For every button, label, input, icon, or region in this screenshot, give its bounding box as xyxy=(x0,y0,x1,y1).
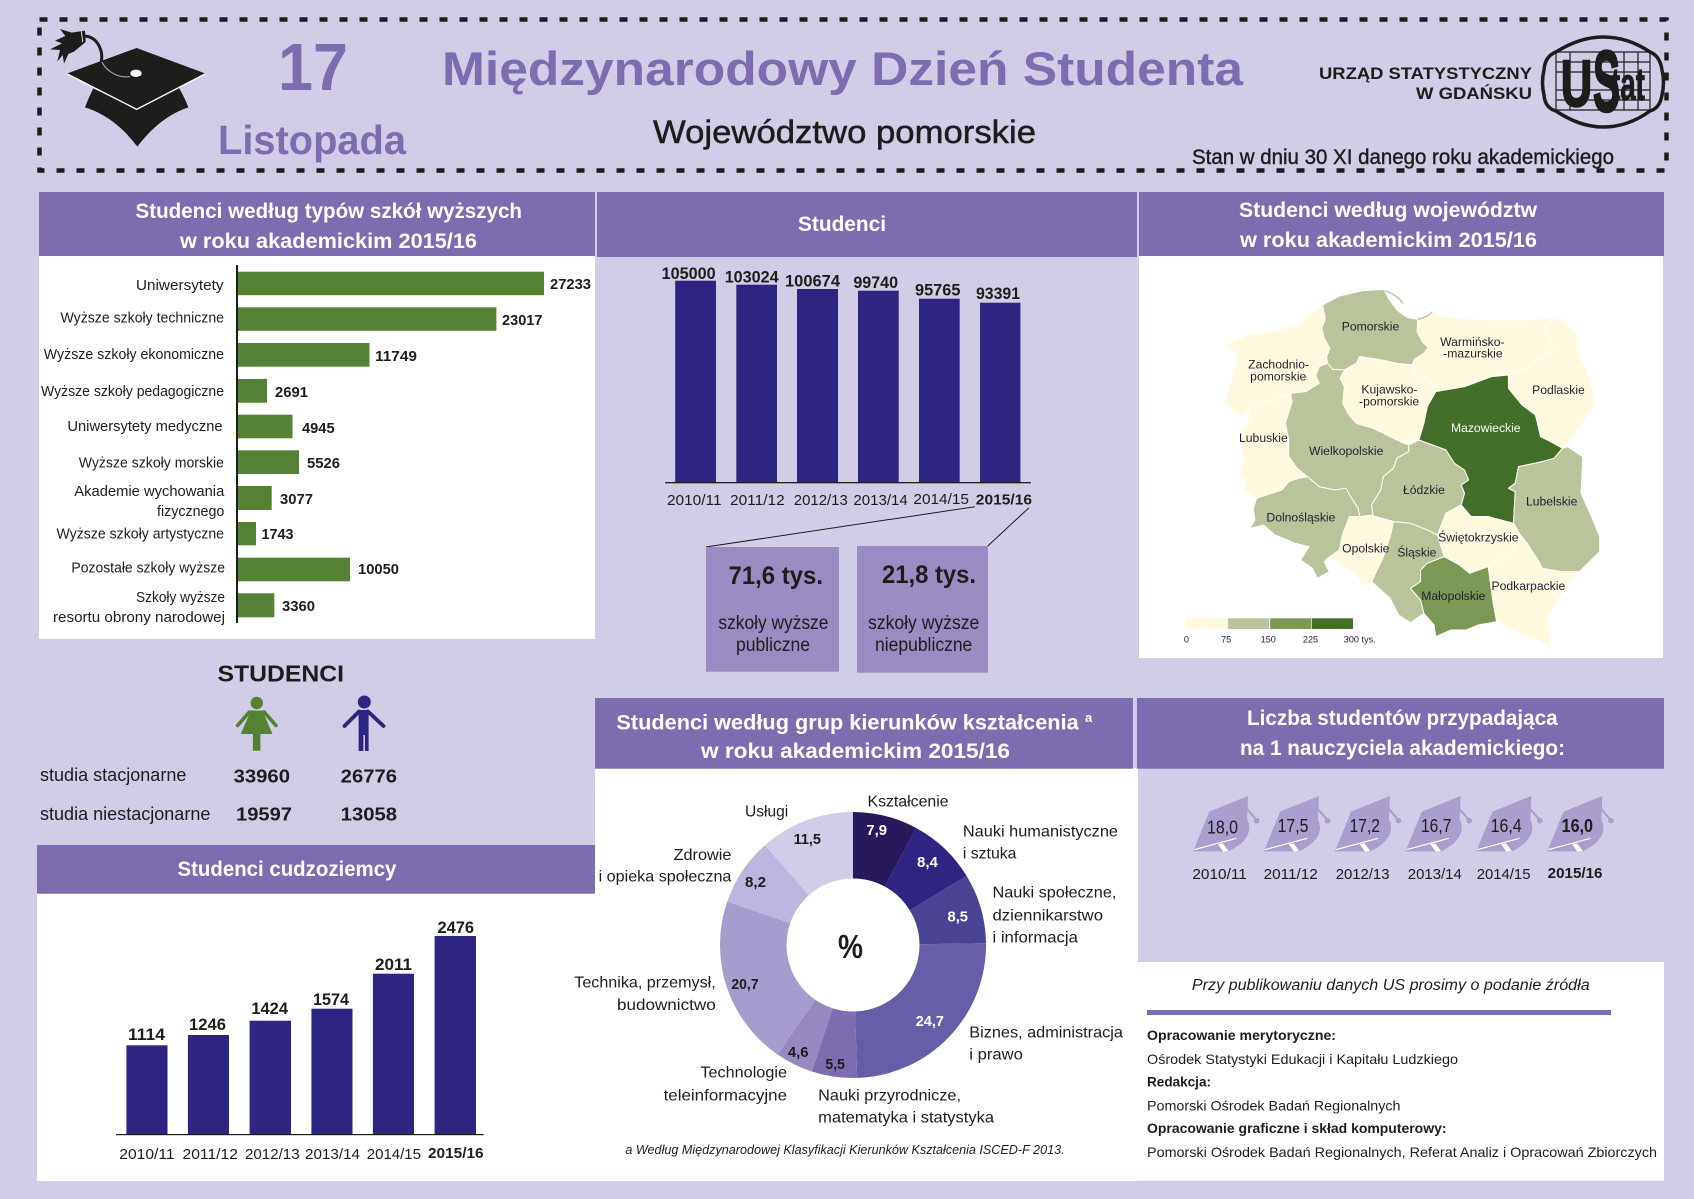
map legend xyxy=(1184,618,1376,645)
donut chart: 8,2 xyxy=(745,874,766,891)
bar chart: school types: 4945 xyxy=(302,420,335,437)
panel: school types xyxy=(39,192,595,639)
bar chart: foreign students: 2012/13 xyxy=(245,1146,300,1163)
bar chart: school types: Wyższe szkoły morskie xyxy=(79,456,224,472)
panel: students per teacher xyxy=(1137,698,1664,883)
subtitle: Województwo pomorskie xyxy=(653,114,1036,150)
cap icons with values: 17,5 xyxy=(1278,816,1308,836)
bar chart: foreign students xyxy=(116,918,484,1163)
icon: man xyxy=(344,696,384,751)
callout connector lines xyxy=(706,507,1029,547)
bar chart: students: 105000 xyxy=(662,264,716,283)
bar chart: school types: 3360 xyxy=(282,598,315,615)
bar chart: school types: 10050 xyxy=(358,561,399,578)
bar chart: foreign students: 2010/11 xyxy=(119,1146,175,1163)
heading: school types: w roku akademickim 2015/16 xyxy=(179,230,477,253)
heading: school types xyxy=(136,200,522,253)
donut labels: Zdrowie xyxy=(674,847,732,864)
heading: students: Studenci xyxy=(798,213,886,236)
header frame xyxy=(40,20,1666,170)
bar chart: foreign students: 2011 xyxy=(375,955,412,974)
donut labels: Biznes, administracja xyxy=(969,1025,1123,1042)
bar chart: school types: Szkoły wyższe xyxy=(136,590,225,606)
cap icons with values: 16,7 xyxy=(1421,816,1451,836)
callout: non-public schools: szkoły wyższe xyxy=(868,613,979,634)
title: Międzynarodowy Dzień Studenta xyxy=(442,42,1244,95)
bar chart: school types: 2691 xyxy=(275,384,308,401)
bar chart: school types: Wyższe szkoły ekonomiczne xyxy=(44,347,224,363)
map of Poland: Dolnośląskie xyxy=(1266,511,1336,525)
bar chart: foreign students: 2011/12 xyxy=(182,1146,238,1163)
bar chart: school types: 1743 xyxy=(262,526,294,543)
donut labels: i prawo xyxy=(969,1046,1023,1063)
cap icons with values: 2013/14 xyxy=(1408,866,1462,883)
map of Poland: Łódzkie xyxy=(1403,483,1445,497)
heading: voivodeships: w roku akademickim 2015/16 xyxy=(1239,229,1537,252)
map legend: 150 xyxy=(1261,635,1276,645)
bar chart: students: 103024 xyxy=(725,267,779,286)
bar chart: school types: Wyższe szkoły pedagogiczne xyxy=(41,384,224,400)
credits text: Pomorski Ośrodek Badań Regionalnych, Referat Analiz i Opracowań Zbiorczych xyxy=(1147,1144,1657,1160)
cap icons with values: 2011/12 xyxy=(1264,866,1318,883)
credits text xyxy=(1147,1027,1657,1160)
bar chart: school types: Wyższe szkoły artystyczne xyxy=(56,527,224,543)
panel: foreign students xyxy=(37,845,595,1181)
bar chart: school types: resortu obrony narodowej xyxy=(53,610,225,626)
map of Poland: -mazurskie xyxy=(1443,347,1503,361)
donut labels: i sztuka xyxy=(963,845,1016,862)
bar chart: school types xyxy=(41,265,591,626)
map of Poland: Warmińsko- xyxy=(1440,335,1505,349)
map of Poland: pomorskie xyxy=(1250,370,1307,384)
map of Poland xyxy=(1184,289,1600,648)
bar chart: foreign students: 1246 xyxy=(189,1015,226,1034)
bar chart: students: 2011/12 xyxy=(730,492,785,509)
callout: public schools: szkoły wyższe xyxy=(718,613,828,634)
donut chart: 20,7 xyxy=(731,976,759,993)
donut labels: dziennikarstwo xyxy=(992,907,1103,924)
credits text: Opracowanie merytoryczne: xyxy=(1147,1027,1336,1043)
icon: woman xyxy=(238,697,276,751)
donut chart: 7,9 xyxy=(866,822,887,839)
cap icons with values: 17,2 xyxy=(1350,816,1380,836)
bar chart: school types: fizycznego xyxy=(157,504,224,520)
table: students by study mode: 33960 xyxy=(234,766,290,786)
map of Poland: -pomorskie xyxy=(1359,395,1419,409)
bar chart: students: 100674 xyxy=(785,272,841,291)
cap icons with values: 2012/13 xyxy=(1336,866,1390,883)
heading: students per teacher: Liczba studentów przypadająca xyxy=(1247,707,1558,730)
heading: foreign students: Studenci cudzoziemcy xyxy=(178,858,397,881)
cap icons with values: 16,0 xyxy=(1562,816,1593,836)
callout: public schools xyxy=(706,547,839,672)
heading: students per teacher: na 1 nauczyciela akademickiego: xyxy=(1240,737,1565,760)
icon: UStat logo: tat xyxy=(1611,58,1645,110)
callout: public schools: 71,6 tys. xyxy=(728,562,823,590)
icon: UStat logo: U xyxy=(1561,47,1592,120)
bar chart: students: 2014/15 xyxy=(913,491,969,508)
bar chart: foreign students: 2476 xyxy=(438,918,474,937)
map of Poland: Śląskie xyxy=(1397,545,1437,560)
table: students by study mode xyxy=(40,765,397,824)
icon: graduation cap xyxy=(50,29,205,147)
credits text: Ośrodek Statystyki Edukacji i Kapitału Ludzkiego xyxy=(1147,1051,1458,1067)
map of Poland: Podlaskie xyxy=(1532,383,1585,397)
donut labels: Usługi xyxy=(745,804,788,821)
panel: credits xyxy=(1137,962,1664,1181)
bar chart: foreign students: 2013/14 xyxy=(305,1146,360,1163)
cap icons with values: 2010/11 xyxy=(1192,866,1247,883)
table: students by study mode: 13058 xyxy=(341,804,397,824)
bar chart: students: 93391 xyxy=(976,284,1020,303)
heading: voivodeships: Studenci według województw xyxy=(1239,199,1538,222)
donut chart: 5,5 xyxy=(825,1056,845,1073)
icon: UStat logo: S xyxy=(1593,34,1620,130)
bar chart: school types: Wyższe szkoły techniczne xyxy=(60,311,224,327)
donut labels: i opieka społeczna xyxy=(599,869,732,886)
donut chart: 4,6 xyxy=(788,1044,809,1061)
map of Poland: Mazowieckie xyxy=(1451,421,1521,435)
map legend: 225 xyxy=(1303,635,1318,645)
bar chart: students: 99740 xyxy=(853,273,898,292)
office name: URZĄD STATYSTYCZNY xyxy=(1319,64,1533,83)
map of Poland: Lubuskie xyxy=(1239,431,1288,445)
bar chart: foreign students: 2015/16 xyxy=(428,1145,484,1162)
cap icons with values: 16,4 xyxy=(1491,816,1522,836)
table: students by study mode: studia niestacjonarne xyxy=(40,804,210,824)
title: month: Listopada xyxy=(218,117,407,163)
table: students by study mode: studia stacjonarne xyxy=(40,765,186,785)
donut labels: i informacja xyxy=(992,929,1078,946)
map legend: 300 tys. xyxy=(1344,635,1376,645)
map legend: 75 xyxy=(1221,635,1231,645)
bar chart: students xyxy=(662,264,1032,509)
bar chart: school types: Uniwersytety xyxy=(136,278,224,294)
map of Poland: Małopolskie xyxy=(1421,589,1486,603)
heading: school types: Studenci według typów szkół wyższych xyxy=(136,200,522,223)
heading: fields of study xyxy=(616,710,1093,763)
donut chart: % xyxy=(838,928,863,965)
map of Poland: Kujawsko- xyxy=(1361,383,1417,397)
credits text: Redakcja: xyxy=(1147,1074,1211,1090)
callout: non-public schools: 21,8 tys. xyxy=(882,561,976,589)
donut labels: budownictwo xyxy=(617,997,716,1014)
bar chart: students: 2012/13 xyxy=(794,492,848,509)
donut labels xyxy=(574,794,1123,1127)
bar chart: school types: Uniwersytety medyczne xyxy=(67,419,223,435)
office name xyxy=(1319,64,1533,103)
panel: voivodeships map xyxy=(1139,192,1664,658)
credits text: Pomorski Ośrodek Badań Regionalnych xyxy=(1147,1098,1400,1114)
map of Poland: Świętokrzyskie xyxy=(1438,530,1519,545)
donut labels: Nauki humanistyczne xyxy=(963,824,1118,841)
table: students by study mode: 26776 xyxy=(341,766,397,786)
bar chart: school types: 23017 xyxy=(502,312,542,329)
donut labels: teleinformacyjne xyxy=(664,1088,787,1105)
heading: fields of study: a xyxy=(1085,710,1093,725)
bar chart: school types: Pozostałe szkoły wyższe xyxy=(71,561,225,577)
cap icons with values: 2014/15 xyxy=(1477,866,1530,883)
cap icons with values: 18,0 xyxy=(1207,817,1238,837)
map of Poland: Opolskie xyxy=(1342,542,1390,556)
bar chart: foreign students: 1114 xyxy=(128,1025,166,1044)
source note: Przy publikowaniu danych US prosimy o podanie źródła xyxy=(1192,977,1590,994)
donut chart xyxy=(720,812,986,1078)
donut labels: Nauki społeczne, xyxy=(992,885,1116,902)
bar chart: foreign students: 1424 xyxy=(251,999,289,1018)
heading: voivodeships xyxy=(1239,199,1538,252)
icon: UStat logo xyxy=(1542,34,1664,130)
heading: gender: STUDENCI xyxy=(218,661,344,687)
donut chart: 8,4 xyxy=(917,854,939,871)
map legend: 0 xyxy=(1184,635,1189,645)
callout: non-public schools: niepubliczne xyxy=(875,635,972,656)
bar chart: school types: 11749 xyxy=(375,348,417,365)
donut labels: Technika, przemysł, xyxy=(574,975,716,992)
title: day number: 17 xyxy=(278,30,348,105)
heading: students per teacher xyxy=(1240,707,1565,760)
bar chart: school types: 5526 xyxy=(307,455,340,472)
panel: fields of study xyxy=(574,698,1138,1181)
bar chart: students: 2015/16 xyxy=(976,492,1032,509)
donut labels: Nauki przyrodnicze, xyxy=(818,1088,961,1105)
footnote: a Według Międzynarodowej Klasyfikacji Kierunków Kształcenia ISCED-F 2013. xyxy=(625,1142,1065,1157)
bar chart: school types: 3077 xyxy=(280,491,313,508)
map of Poland: Wielkopolskie xyxy=(1309,444,1384,458)
donut chart: 24,7 xyxy=(916,1013,944,1030)
cap icons with values xyxy=(1192,796,1614,883)
donut labels: matematyka i statystyka xyxy=(818,1110,994,1127)
bar chart: students: 2013/14 xyxy=(853,492,908,509)
callout: non-public schools xyxy=(857,546,988,673)
bar chart: school types: 27233 xyxy=(550,276,591,293)
heading: fields of study: Studenci według grup kierunków kształcenia xyxy=(616,711,1079,734)
table: students by study mode: 19597 xyxy=(236,804,292,824)
panel: students xyxy=(597,192,1137,673)
office name: W GDAŃSKU xyxy=(1416,84,1532,103)
callout: public schools: publiczne xyxy=(736,635,810,656)
date note: Stan w dniu 30 XI danego roku akademickiego xyxy=(1192,146,1614,169)
donut labels: Technologie xyxy=(700,1065,787,1082)
cap icons with values: 2015/16 xyxy=(1548,865,1602,882)
bar chart: school types: Akademie wychowania xyxy=(74,484,225,500)
bar chart: students: 95765 xyxy=(915,280,960,299)
donut chart: 11,5 xyxy=(794,831,821,848)
map of Poland: Lubelskie xyxy=(1526,495,1578,509)
map of Poland: Pomorskie xyxy=(1342,320,1400,334)
map of Poland: Zachodnio- xyxy=(1248,358,1309,372)
bar chart: foreign students: 1574 xyxy=(313,990,350,1009)
panel: students by gender xyxy=(40,661,397,824)
donut chart: 8,5 xyxy=(948,909,968,926)
heading: fields of study: w roku akademickim 2015/16 xyxy=(700,740,1010,763)
credits text: Opracowanie graficzne i skład komputerowy: xyxy=(1147,1120,1446,1136)
donut labels: Kształcenie xyxy=(868,794,949,811)
bar chart: foreign students: 2014/15 xyxy=(367,1146,421,1163)
map of Poland: Podkarpackie xyxy=(1492,579,1565,593)
bar chart: students: 2010/11 xyxy=(667,492,722,509)
